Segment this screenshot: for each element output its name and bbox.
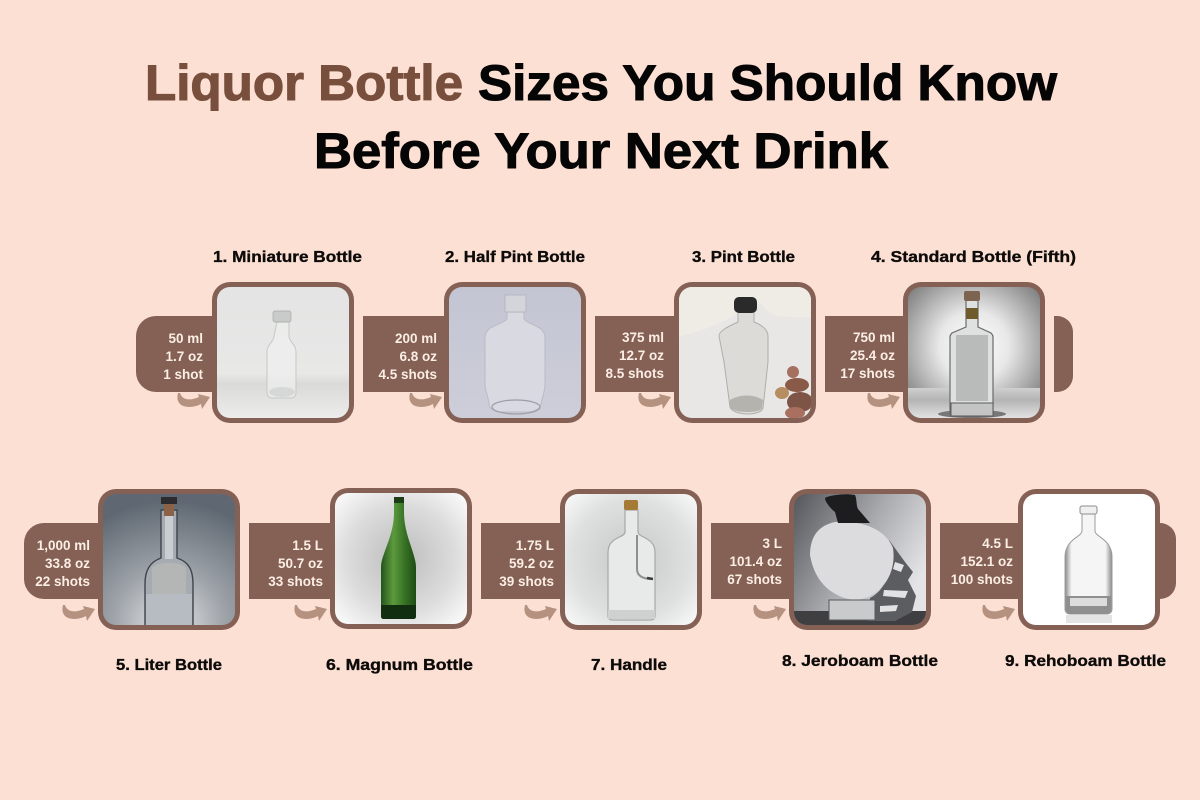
band: half pint volumes: 200 ml (395, 331, 437, 346)
heading: rehoboam: 9. Rehoboam Bottle (1005, 653, 1166, 670)
panel: magnum bottle (249, 488, 473, 674)
title: Liquor Bottle (145, 55, 463, 111)
title (145, 55, 1057, 179)
image frame: pint bottle (674, 282, 816, 423)
title: Before Your Next Drink (314, 123, 888, 179)
band: jeroboam volumes: 67 shots (727, 572, 782, 587)
band: miniature volumes: 50 ml (168, 331, 203, 346)
band: standard volumes: 17 shots (840, 366, 895, 381)
heading: half pint: 2. Half Pint Bottle (445, 249, 585, 266)
heading: miniature: 1. Miniature Bottle (213, 249, 362, 266)
band: liter volumes: 22 shots (35, 574, 90, 589)
band: pint volumes: 8.5 shots (605, 366, 664, 381)
arrow (294, 605, 327, 621)
band: magnum volumes (249, 523, 339, 599)
image frame: magnum bottle (330, 488, 472, 629)
band: handle volumes: 59.2 oz (509, 556, 554, 571)
heading: handle: 7. Handle (591, 657, 667, 674)
band: jeroboam volumes (711, 523, 931, 599)
band: handle volumes: 39 shots (499, 574, 554, 589)
arrow (524, 605, 557, 621)
arrow (177, 393, 210, 409)
heading: jeroboam: 8. Jeroboam Bottle (782, 653, 938, 670)
image frame: handle (560, 489, 702, 630)
band: handle volumes (481, 523, 702, 599)
band: standard volumes: 25.4 oz (850, 348, 895, 363)
panel: miniature bottle (136, 249, 362, 423)
band: rehoboam volumes: 152.1 oz (960, 554, 1013, 569)
band: magnum volumes: 1.5 L (292, 538, 323, 553)
arrow (62, 605, 95, 621)
band: standard volumes (825, 316, 915, 392)
title: Sizes You Should Know (478, 55, 1057, 111)
band: magnum volumes: 50.7 oz (278, 556, 323, 571)
band: miniature volumes (136, 316, 230, 392)
panel: jeroboam bottle (711, 489, 938, 670)
band: rehoboam volumes (940, 523, 1030, 599)
arrow (753, 605, 786, 621)
arrow (409, 393, 442, 409)
band: liter volumes: 33.8 oz (45, 556, 90, 571)
band: half pint volumes: 6.8 oz (399, 349, 437, 364)
heading: magnum: 6. Magnum Bottle (326, 657, 473, 674)
band: standard volumes: 750 ml (853, 330, 895, 345)
heading: pint: 3. Pint Bottle (692, 249, 795, 266)
band: half pint volumes: 4.5 shots (378, 367, 437, 382)
band: handle volumes: 1.75 L (516, 538, 554, 553)
panel: rehoboam bottle (940, 489, 1176, 670)
band: jeroboam volumes: 101.4 oz (729, 554, 782, 569)
band: liter volumes: 1,000 ml (37, 538, 90, 553)
arrow (867, 393, 900, 409)
image frame: jeroboam bottle (789, 489, 931, 630)
band: miniature volumes: 1 shot (163, 367, 203, 382)
band end tab (1054, 316, 1073, 392)
image frame: standard bottle (903, 282, 1045, 423)
panel: pint bottle (595, 249, 816, 423)
panel: standard bottle (825, 249, 1076, 423)
band: jeroboam volumes: 3 L (762, 536, 782, 551)
image frame: miniature bottle (212, 282, 354, 423)
heading: standard: 4. Standard Bottle (Fifth) (871, 249, 1076, 266)
band: miniature volumes: 1.7 oz (165, 349, 203, 364)
image frame: half pint bottle (444, 282, 586, 423)
arrow (638, 393, 671, 409)
band: pint volumes (595, 316, 816, 392)
band: rehoboam volumes: 100 shots (951, 572, 1013, 587)
arrow (982, 605, 1015, 621)
panel: handle (481, 489, 702, 674)
band: liter volumes (24, 523, 110, 599)
band end tab (1158, 523, 1176, 599)
band: pint volumes: 12.7 oz (619, 348, 664, 363)
image frame: liter bottle (98, 489, 240, 630)
band: magnum volumes: 33 shots (268, 574, 323, 589)
heading: liter: 5. Liter Bottle (116, 657, 222, 674)
band: pint volumes: 375 ml (622, 330, 664, 345)
image frame: rehoboam bottle (1018, 489, 1160, 630)
panel: half pint bottle (363, 249, 586, 423)
panel: liter bottle (24, 489, 240, 674)
band: rehoboam volumes: 4.5 L (982, 536, 1013, 551)
band: half pint volumes (363, 316, 586, 392)
